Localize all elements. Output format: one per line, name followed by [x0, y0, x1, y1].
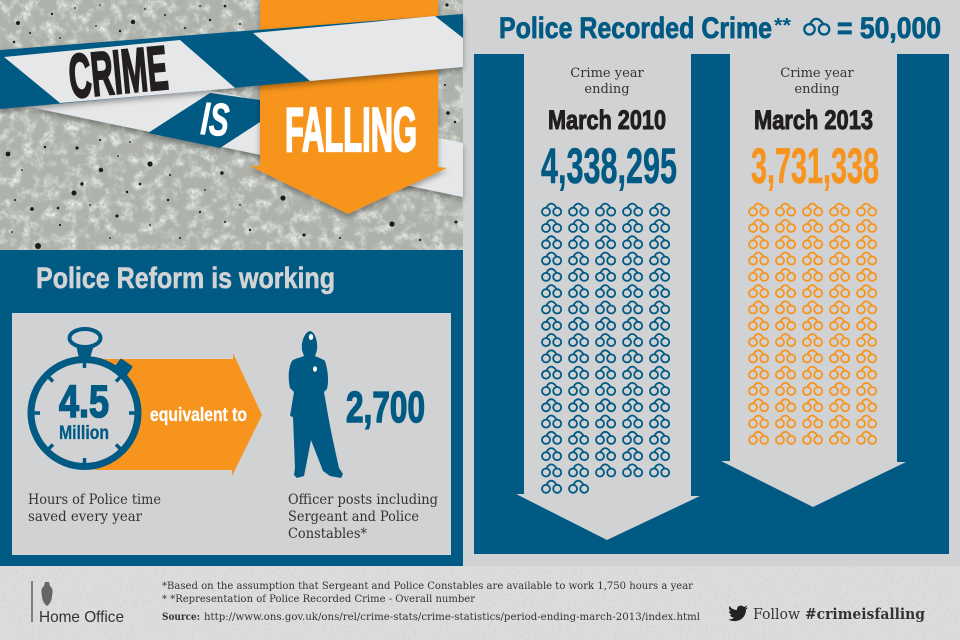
footnotes: Source: [162, 611, 200, 623]
text: officer posts: Sergeant and Police [288, 509, 419, 525]
text: hours saved: Hours of Police time [28, 492, 161, 508]
text: follow hashtag: #crimeisfalling [805, 605, 925, 623]
text: officer posts [288, 492, 438, 542]
arrow: equivalent to: equivalent to [150, 405, 247, 426]
label: crime year ending: ending [794, 82, 840, 97]
ribbon: orange falling arrow [250, 0, 447, 214]
label: crime year ending: Crime year [780, 66, 855, 81]
text: hours saved [28, 492, 161, 525]
stat: 2,700: 2,700 [346, 383, 425, 432]
text: follow hashtag: Follow [753, 605, 800, 623]
label: crime year ending [570, 66, 645, 97]
text: officer posts: Officer posts including [288, 492, 438, 508]
heading: IS: IS [199, 92, 231, 146]
panel: blue chart background [474, 54, 949, 554]
legend value: = 50,000 [837, 12, 941, 45]
arrow: march 2013 column [721, 54, 906, 507]
heading: police recorded crime: Police Recorded Crime [499, 12, 772, 45]
heading: police reform is working: Police Reform is working [36, 262, 335, 295]
date: march 2013: March 2013 [754, 105, 873, 135]
text: officer posts: Constables* [288, 526, 367, 542]
tape: upper strip [0, 14, 463, 109]
label: crime year ending: ending [584, 82, 630, 97]
pictogram: handcuffs 2010 [542, 204, 669, 493]
footnotes: *Based on the assumption that Sergeant and Police Constables are available to work 1,750 hours a year [162, 580, 694, 592]
heading: CRIME: CRIME [66, 34, 171, 112]
pictogram: handcuffs 2013 [749, 204, 876, 444]
number: 4,338,295: 4,338,295 [541, 138, 677, 194]
stat: 4.5 million: 4.5 [59, 376, 109, 427]
icon: handcuff legend [804, 19, 829, 35]
label: crime year ending [780, 66, 855, 97]
icon: police officer [289, 331, 343, 478]
text: hours saved: saved every year [28, 509, 142, 525]
footnotes: http://www.ons.gov.uk/ons/rel/crime-stats/crime-statistics/period-ending-march-2013/index.html [204, 611, 701, 623]
panel: footer [0, 566, 960, 640]
panel: concrete header with tape [0, 0, 463, 250]
icon: stopwatch [31, 329, 138, 466]
inner grey panel [12, 313, 451, 555]
date: march 2010: March 2010 [548, 105, 666, 135]
logo: home office: Home Office [39, 609, 124, 626]
footnotes [162, 580, 701, 623]
icon: twitter bird [728, 606, 748, 621]
tape: lower strip [30, 88, 463, 197]
arrow: equivalent to [95, 353, 262, 476]
arrow: march 2010 column [516, 54, 700, 540]
logo: home office [32, 581, 124, 626]
footnotes: * *Representation of Police Recorded Crime - Overall number [162, 593, 476, 605]
icon: stopwatch: Million [59, 423, 109, 444]
panel: concrete header with tape: FALLING [285, 96, 417, 165]
text: follow hashtag [753, 605, 925, 623]
heading: police recorded crime: ** [774, 15, 791, 37]
label: crime year ending: Crime year [570, 66, 645, 81]
panel: police reform [0, 250, 463, 566]
